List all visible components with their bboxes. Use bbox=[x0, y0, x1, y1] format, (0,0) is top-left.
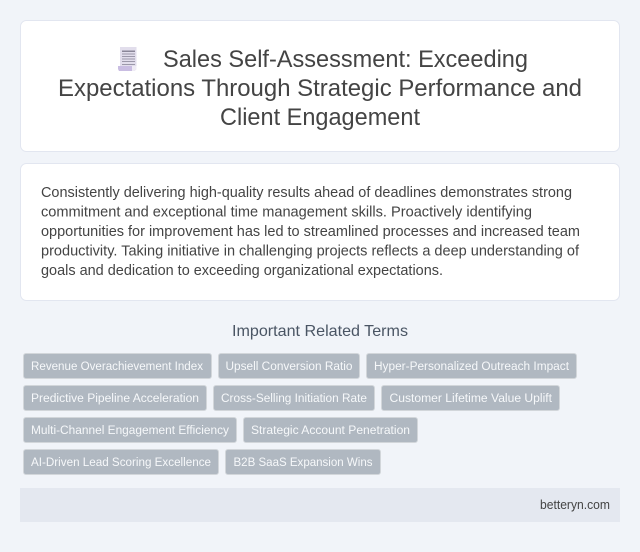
title: Sales Self-Assessment: Exceeding bbox=[163, 46, 528, 73]
tag: B2B SaaS Expansion Wins bbox=[234, 455, 372, 469]
summary text bbox=[41, 185, 580, 279]
tag: Revenue Overachievement Index bbox=[31, 359, 203, 373]
tag: Cross-Selling Initiation Rate bbox=[221, 391, 367, 405]
tag: Predictive Pipeline Acceleration bbox=[31, 391, 199, 405]
header panel bbox=[20, 20, 620, 152]
tag bbox=[214, 386, 374, 410]
summary panel bbox=[20, 164, 620, 300]
summary text: commitment and exceptional time management skills. Proactively identifying bbox=[41, 204, 532, 220]
title bbox=[58, 46, 582, 131]
tag bbox=[24, 354, 212, 378]
tag: Hyper-Personalized Outreach Impact bbox=[374, 359, 570, 373]
summary text: opportunities for improvement has led to streamlined processes and increased team bbox=[41, 224, 580, 240]
tag bbox=[382, 386, 560, 410]
tag: Customer Lifetime Value Uplift bbox=[390, 391, 553, 405]
tag bbox=[218, 354, 360, 378]
tag bbox=[24, 418, 236, 442]
tag: Strategic Account Penetration bbox=[251, 423, 410, 437]
heading: related terms: Important Related Terms bbox=[232, 323, 408, 340]
icon: receipt scroll bbox=[118, 47, 136, 71]
footer bbox=[20, 488, 620, 522]
tag: Multi-Channel Engagement Efficiency bbox=[31, 423, 230, 437]
tag bbox=[24, 450, 218, 474]
tag list bbox=[24, 354, 576, 474]
tag bbox=[366, 354, 576, 378]
tag: Upsell Conversion Ratio bbox=[226, 359, 353, 373]
summary text: goals and dedication to exceeding organizational expectations. bbox=[41, 263, 443, 279]
title: Client Engagement bbox=[220, 104, 420, 131]
tag bbox=[24, 386, 206, 410]
tag: AI-Driven Lead Scoring Excellence bbox=[31, 455, 211, 469]
summary text: Consistently delivering high-quality results ahead of deadlines demonstrates strong bbox=[41, 185, 572, 201]
tag bbox=[244, 418, 418, 442]
title: Expectations Through Strategic Performance and bbox=[58, 75, 582, 102]
footer: betteryn.com bbox=[540, 498, 610, 512]
tag bbox=[226, 450, 380, 474]
summary text: productivity. Taking initiative in challenging projects reflects a deep understanding of bbox=[41, 244, 580, 260]
